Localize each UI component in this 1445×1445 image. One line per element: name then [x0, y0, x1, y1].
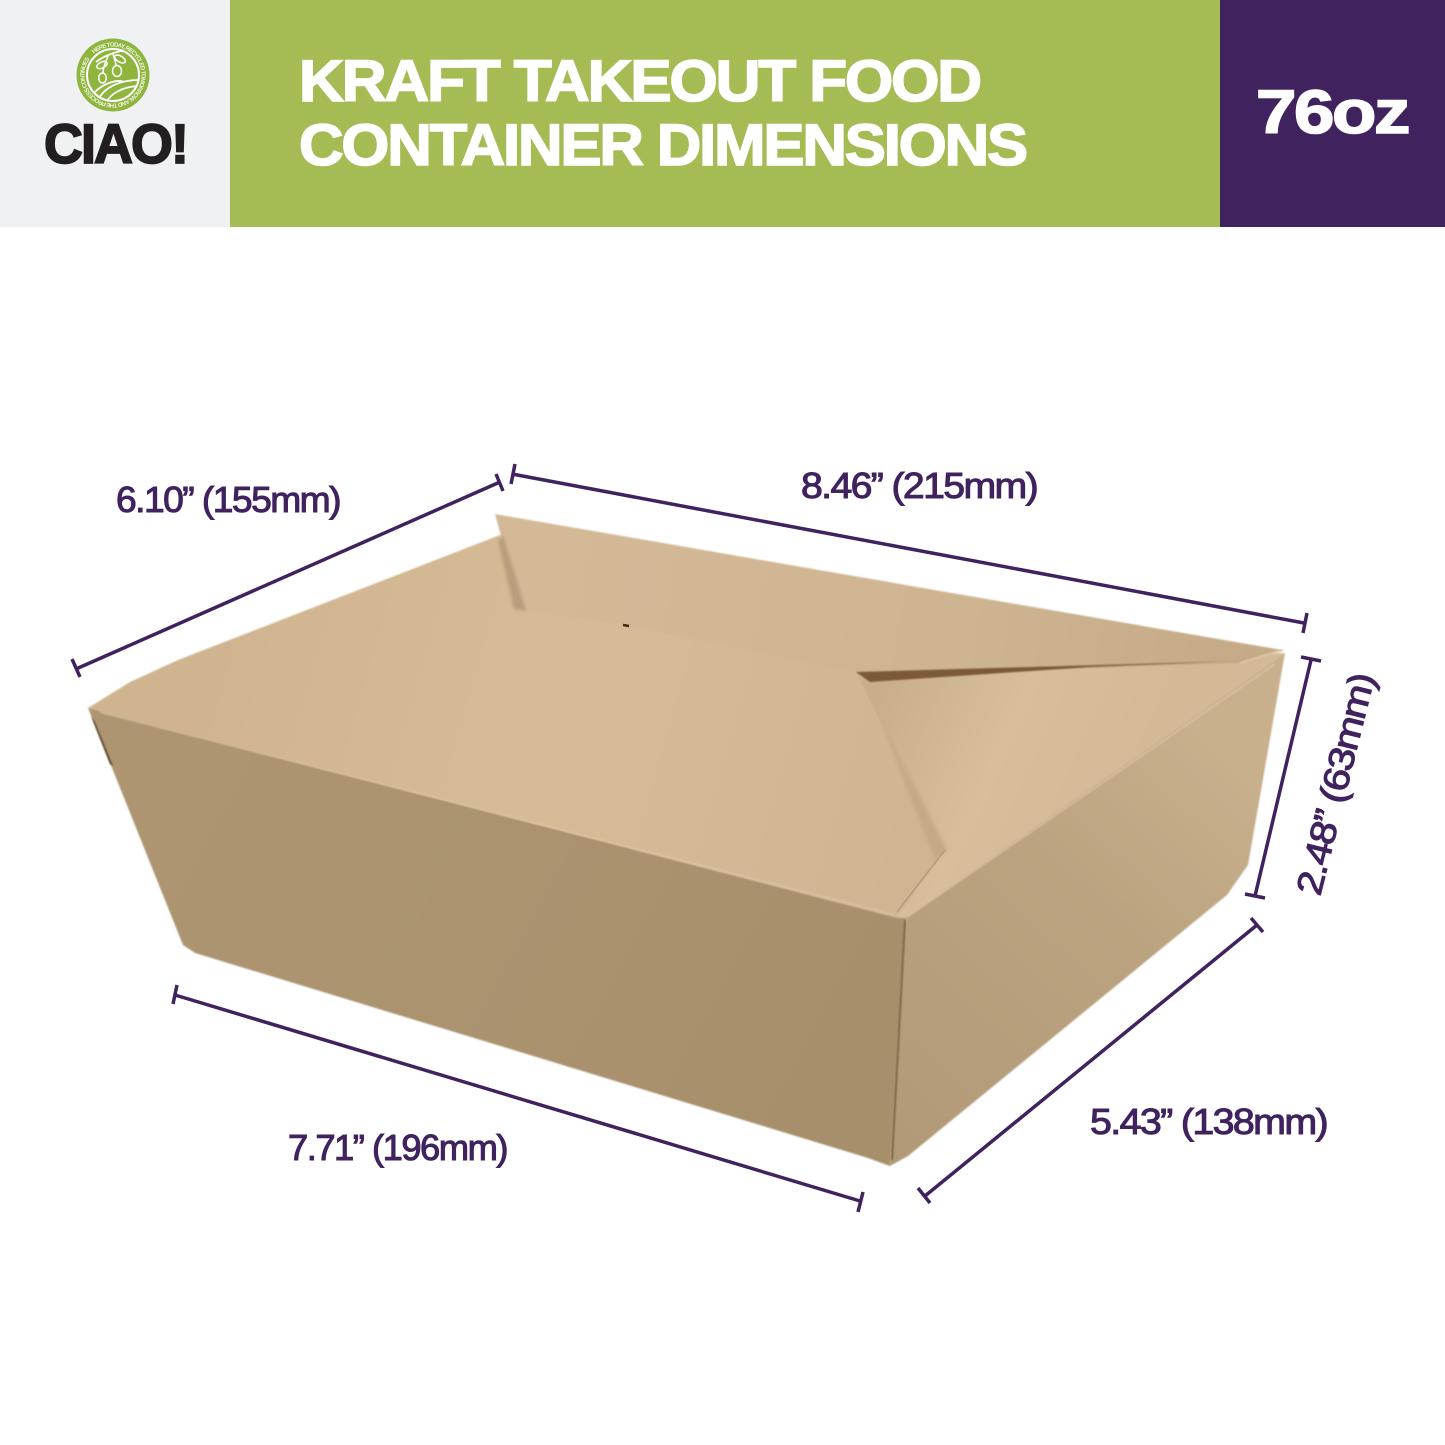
dimension label: 2.48: 2.48” (63mm)	[1288, 670, 1382, 899]
logo panel	[0, 0, 230, 227]
title: KRAFT TAKEOUT FOOD	[299, 49, 980, 114]
box lid flap	[88, 535, 945, 918]
crease highlights	[100, 664, 1275, 917]
flap slit shadow	[856, 660, 1262, 682]
dimension label: 8.46: 8.46” (215mm)	[801, 465, 1037, 506]
dimension: depth top	[72, 474, 503, 677]
dimension label: 7.71: 7.71” (196mm)	[288, 1127, 507, 1168]
crease shadow beside tuck tab	[498, 535, 526, 611]
dimension: width bottom	[918, 918, 1263, 1203]
dimension label: 5.43: 5.43” (138mm)	[1090, 1101, 1327, 1142]
title: CONTAINER DIMENSIONS	[299, 113, 1026, 178]
header band	[0, 0, 1445, 227]
size label: 76oz	[1256, 78, 1409, 146]
logo emblem: HERE TODAY, RECYCLED TOMORROW, AND THE PROCESS CONTINUES	[80, 42, 146, 108]
corner fold lines	[892, 920, 905, 1160]
logo wordmark: CIAO!	[44, 112, 187, 175]
box upper flap	[495, 514, 1282, 690]
tab slot	[623, 625, 629, 626]
dimension: length bottom	[173, 985, 863, 1212]
flap edge highlight	[1240, 650, 1283, 663]
title panel	[230, 0, 1220, 227]
dimension label: 6.10: 6.10” (155mm)	[116, 479, 340, 520]
box front panel	[88, 708, 905, 1166]
left dark edge	[91, 716, 113, 766]
inner flap shadow	[860, 680, 948, 860]
box right panel	[890, 653, 1285, 1166]
dimension: length top	[511, 464, 1307, 633]
size panel	[1220, 0, 1445, 227]
dimension: height	[1245, 657, 1321, 898]
kraft box photo	[88, 514, 1285, 1166]
box inner flap	[855, 653, 1285, 918]
title	[299, 49, 1026, 178]
